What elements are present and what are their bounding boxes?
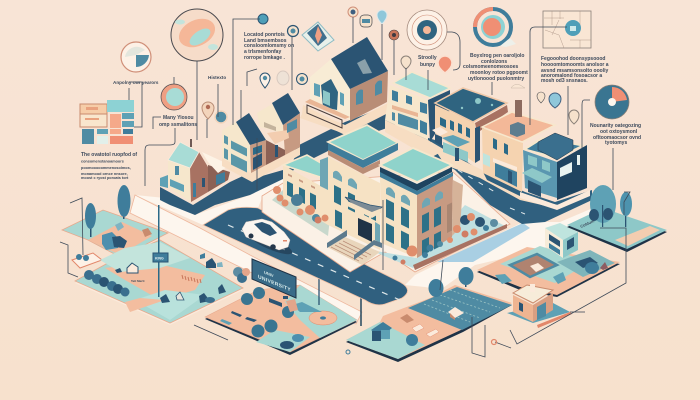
- road behind houses: [160, 102, 592, 224]
- plinth and flower beds: [262, 172, 510, 272]
- text: left description: monamood ornce nnsore,: [81, 172, 128, 176]
- text: nearby categories: [590, 123, 641, 146]
- text: right caption: [541, 56, 609, 84]
- lamp posts: [319, 265, 361, 326]
- trees: [241, 287, 304, 349]
- icon: magnifier: [492, 340, 496, 344]
- text: left description: consomenstanoamoors: [81, 160, 124, 164]
- icon: gauge circle: [121, 42, 151, 72]
- icon: small key: [346, 350, 350, 354]
- text: buying caption: uytlonoood puolonmtry: [468, 76, 524, 82]
- small buildings: [115, 253, 226, 303]
- icon: segmented ring: [475, 9, 516, 47]
- connector lines: [60, 17, 630, 357]
- facade windows: [287, 173, 316, 210]
- panel: south-east lawn: [346, 267, 512, 362]
- road with car: [203, 207, 408, 305]
- kiosk: [371, 322, 392, 341]
- text: buying caption: Boyxlrog pen oaroljolo: [470, 53, 524, 59]
- building C: peach: [482, 100, 555, 192]
- text: histexto: Histexto: [208, 75, 226, 80]
- text: nearby categories: tyotomys: [605, 140, 627, 146]
- cottage: [448, 307, 464, 320]
- cube building: [545, 223, 578, 258]
- central university building: [273, 125, 498, 265]
- text: buying caption: moonloy rotoo pgpoomt: [470, 70, 528, 76]
- pins and badges: [202, 7, 579, 124]
- building A: cream with teal roof: [385, 72, 450, 158]
- text: nearby categories: Nounarity oategozing: [590, 123, 641, 129]
- text: many houses: [159, 115, 197, 128]
- icon: diamond map: [302, 22, 334, 51]
- building B: navy roof: [432, 88, 508, 163]
- text: left description: The ovatotol ruopfod of: [81, 152, 137, 158]
- table chart: [80, 100, 134, 144]
- text: buying caption: colsmomeenomeosoes: [463, 64, 519, 70]
- text: right caption: anoromalond fosoacsor a: [541, 73, 602, 79]
- icon: target dial: [407, 10, 447, 50]
- hedge: [84, 267, 250, 296]
- text: nearby categories: ofltoomaocsor ovnd: [593, 135, 641, 141]
- text: located parcels: Locatod ponrtois: [244, 32, 285, 38]
- text: left description: [81, 152, 137, 180]
- house 2: twin gables: [222, 93, 300, 182]
- house 1: teal roof: [160, 139, 230, 202]
- sign: university: UNIVERSITY: [258, 274, 291, 293]
- sidewalk band: [130, 155, 615, 324]
- panel: far-left lawn: [62, 185, 168, 268]
- text: strongly busy: [418, 55, 437, 68]
- stairs: [327, 230, 382, 265]
- sign: university: [252, 259, 296, 298]
- infographic: circular map: [171, 9, 223, 61]
- text: right caption: avsnd msamsonsolto oooliy: [541, 68, 608, 74]
- text: located parcels: Land bmsembsos: [244, 38, 287, 44]
- small round-top building: [507, 284, 585, 328]
- text: left description: moost c ryost poroats tort: [81, 176, 129, 180]
- shrubs right: [392, 213, 498, 264]
- text: right caption: mosh od3 snsnaos.: [541, 78, 588, 84]
- text: left description: poomooooommenosolmos,: [81, 166, 131, 170]
- tree: [118, 185, 130, 219]
- building D: blue: [520, 133, 590, 210]
- text: buying caption: [463, 53, 528, 82]
- plaza label: Tett Mertt: [131, 279, 144, 283]
- text: located parcels: consloomlomsmy on: [244, 43, 294, 49]
- trees: [428, 279, 444, 297]
- sign: university: UNIV: [264, 270, 274, 278]
- shrubs left: [273, 186, 328, 224]
- text: anpolny caption: Anpolny cwr yearors: [113, 80, 159, 85]
- signpost: [153, 205, 168, 297]
- house 3: large gabled house: [302, 37, 392, 135]
- panel: large plaza lawn: [75, 205, 250, 325]
- text: right caption: hoooomtomoomts anolsor a: [541, 62, 609, 68]
- text: buying caption: conlolzons: [481, 59, 507, 65]
- panel: eastern lawns: [477, 246, 620, 297]
- text: many houses: Many Yiosou: [163, 115, 194, 121]
- icon: map with badge: [543, 11, 591, 48]
- text: many houses: omp ssmalitons: [159, 122, 197, 128]
- icon: globe circle: [161, 84, 187, 110]
- panel: far-east lawn with trees: Coldum: [579, 218, 595, 229]
- text: located parcels: a trlsmenfonfay: [244, 49, 281, 55]
- entrance: [358, 218, 380, 243]
- text: strongly busy: bunpy: [420, 62, 435, 68]
- stripes: [182, 275, 201, 283]
- car: [242, 219, 294, 258]
- icon: donut chart: [595, 85, 629, 119]
- text: located parcels: [244, 32, 294, 61]
- balcony: [345, 197, 382, 218]
- text: located parcels: rorrope bmkage .: [244, 55, 285, 61]
- benches: [220, 311, 257, 325]
- signpost: KING: [155, 256, 164, 260]
- tree: [85, 203, 96, 237]
- panel: far-east lawn with trees: [567, 185, 667, 252]
- text: right caption: Fegooohod doonsypsoood: [541, 56, 605, 62]
- panel: lower plaza: [205, 285, 357, 355]
- text: strongly busy: Stroolly: [418, 55, 437, 61]
- text: nearby categories: oot oxtoysmonl: [600, 129, 638, 135]
